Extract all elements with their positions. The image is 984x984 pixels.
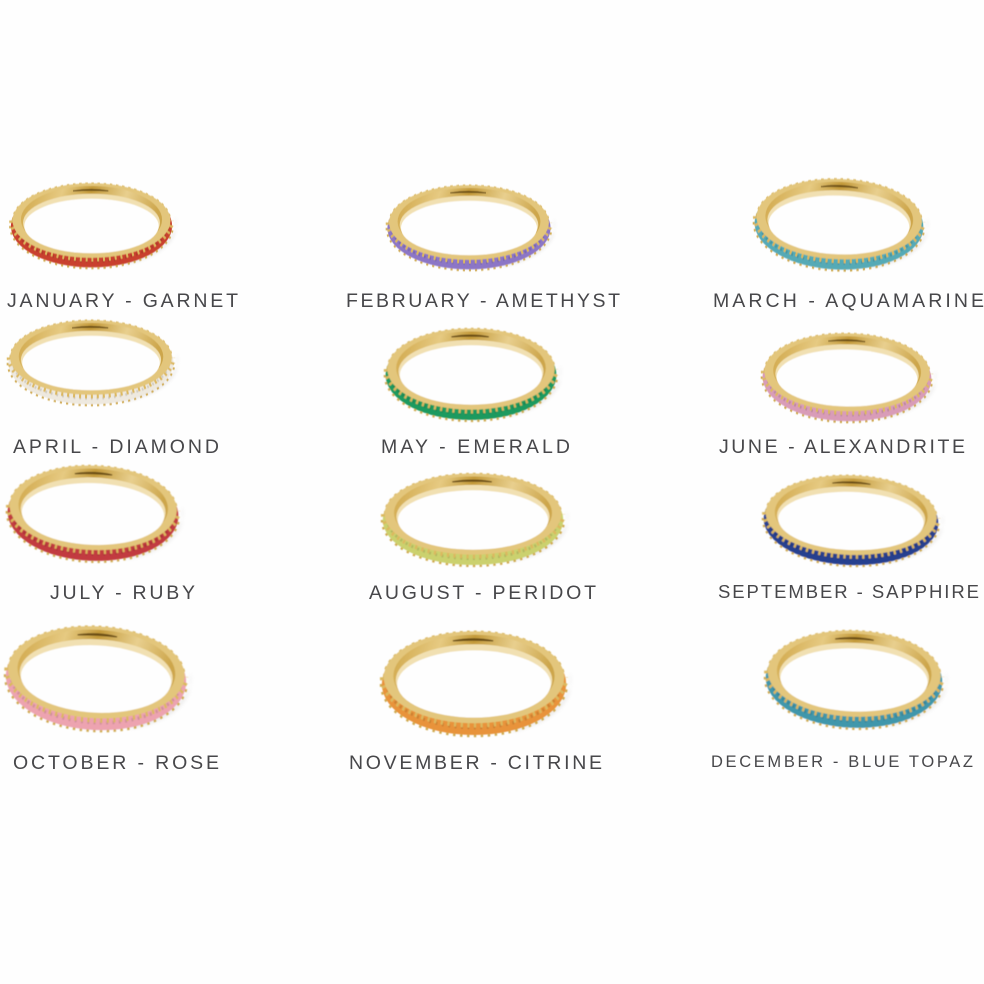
label: October - Rose: OCTOBER - ROSE [13,752,219,774]
label: January - Garnet: JANUARY - GARNET [7,290,238,312]
label: July - Ruby: JULY - RUBY [50,582,195,604]
panel: December - Blue Topaz [711,628,973,771]
ring: sapphire [761,472,944,569]
panel: April - Diamond [8,320,219,458]
label: June - Alexandrite: JUNE - ALEXANDRITE [719,436,965,458]
panel: June - Alexandrite [719,332,965,458]
ring: aquamarine [752,176,929,274]
ring: rose [2,622,194,736]
panel: May - Emerald [381,328,570,458]
panel: November - Citrine [349,631,602,774]
label: April - Diamond: APRIL - DIAMOND [13,436,219,458]
ring: amethyst [387,185,555,270]
ring: blue topaz [763,628,949,732]
ring: alexandrite [761,332,937,424]
label: August - Peridot: AUGUST - PERIDOT [369,582,596,604]
ring: emerald [385,328,561,421]
panel: March - Aquamarine [713,176,984,312]
panel: July - Ruby [5,463,195,604]
label: December - Blue Topaz: DECEMBER - BLUE TOPAZ [711,753,973,771]
label: November - Citrine: NOVEMBER - CITRINE [349,752,602,774]
ring: garnet [10,183,176,268]
panel: February - Amethyst [346,185,620,312]
label: March - Aquamarine: MARCH - AQUAMARINE [713,290,984,312]
ring: citrine [381,631,571,736]
ring: peridot [382,473,568,566]
label: May - Emerald: MAY - EMERALD [381,436,570,458]
ring: diamond [8,320,178,405]
label: February - Amethyst: FEBRUARY - AMETHYST [346,290,620,312]
panel: September - Sapphire [718,472,979,602]
ring: ruby [5,463,184,565]
label: September - Sapphire: SEPTEMBER - SAPPHIRE [718,581,979,602]
panel: January - Garnet [7,183,238,312]
panel: August - Peridot [369,473,596,604]
panel: October - Rose [2,622,219,774]
